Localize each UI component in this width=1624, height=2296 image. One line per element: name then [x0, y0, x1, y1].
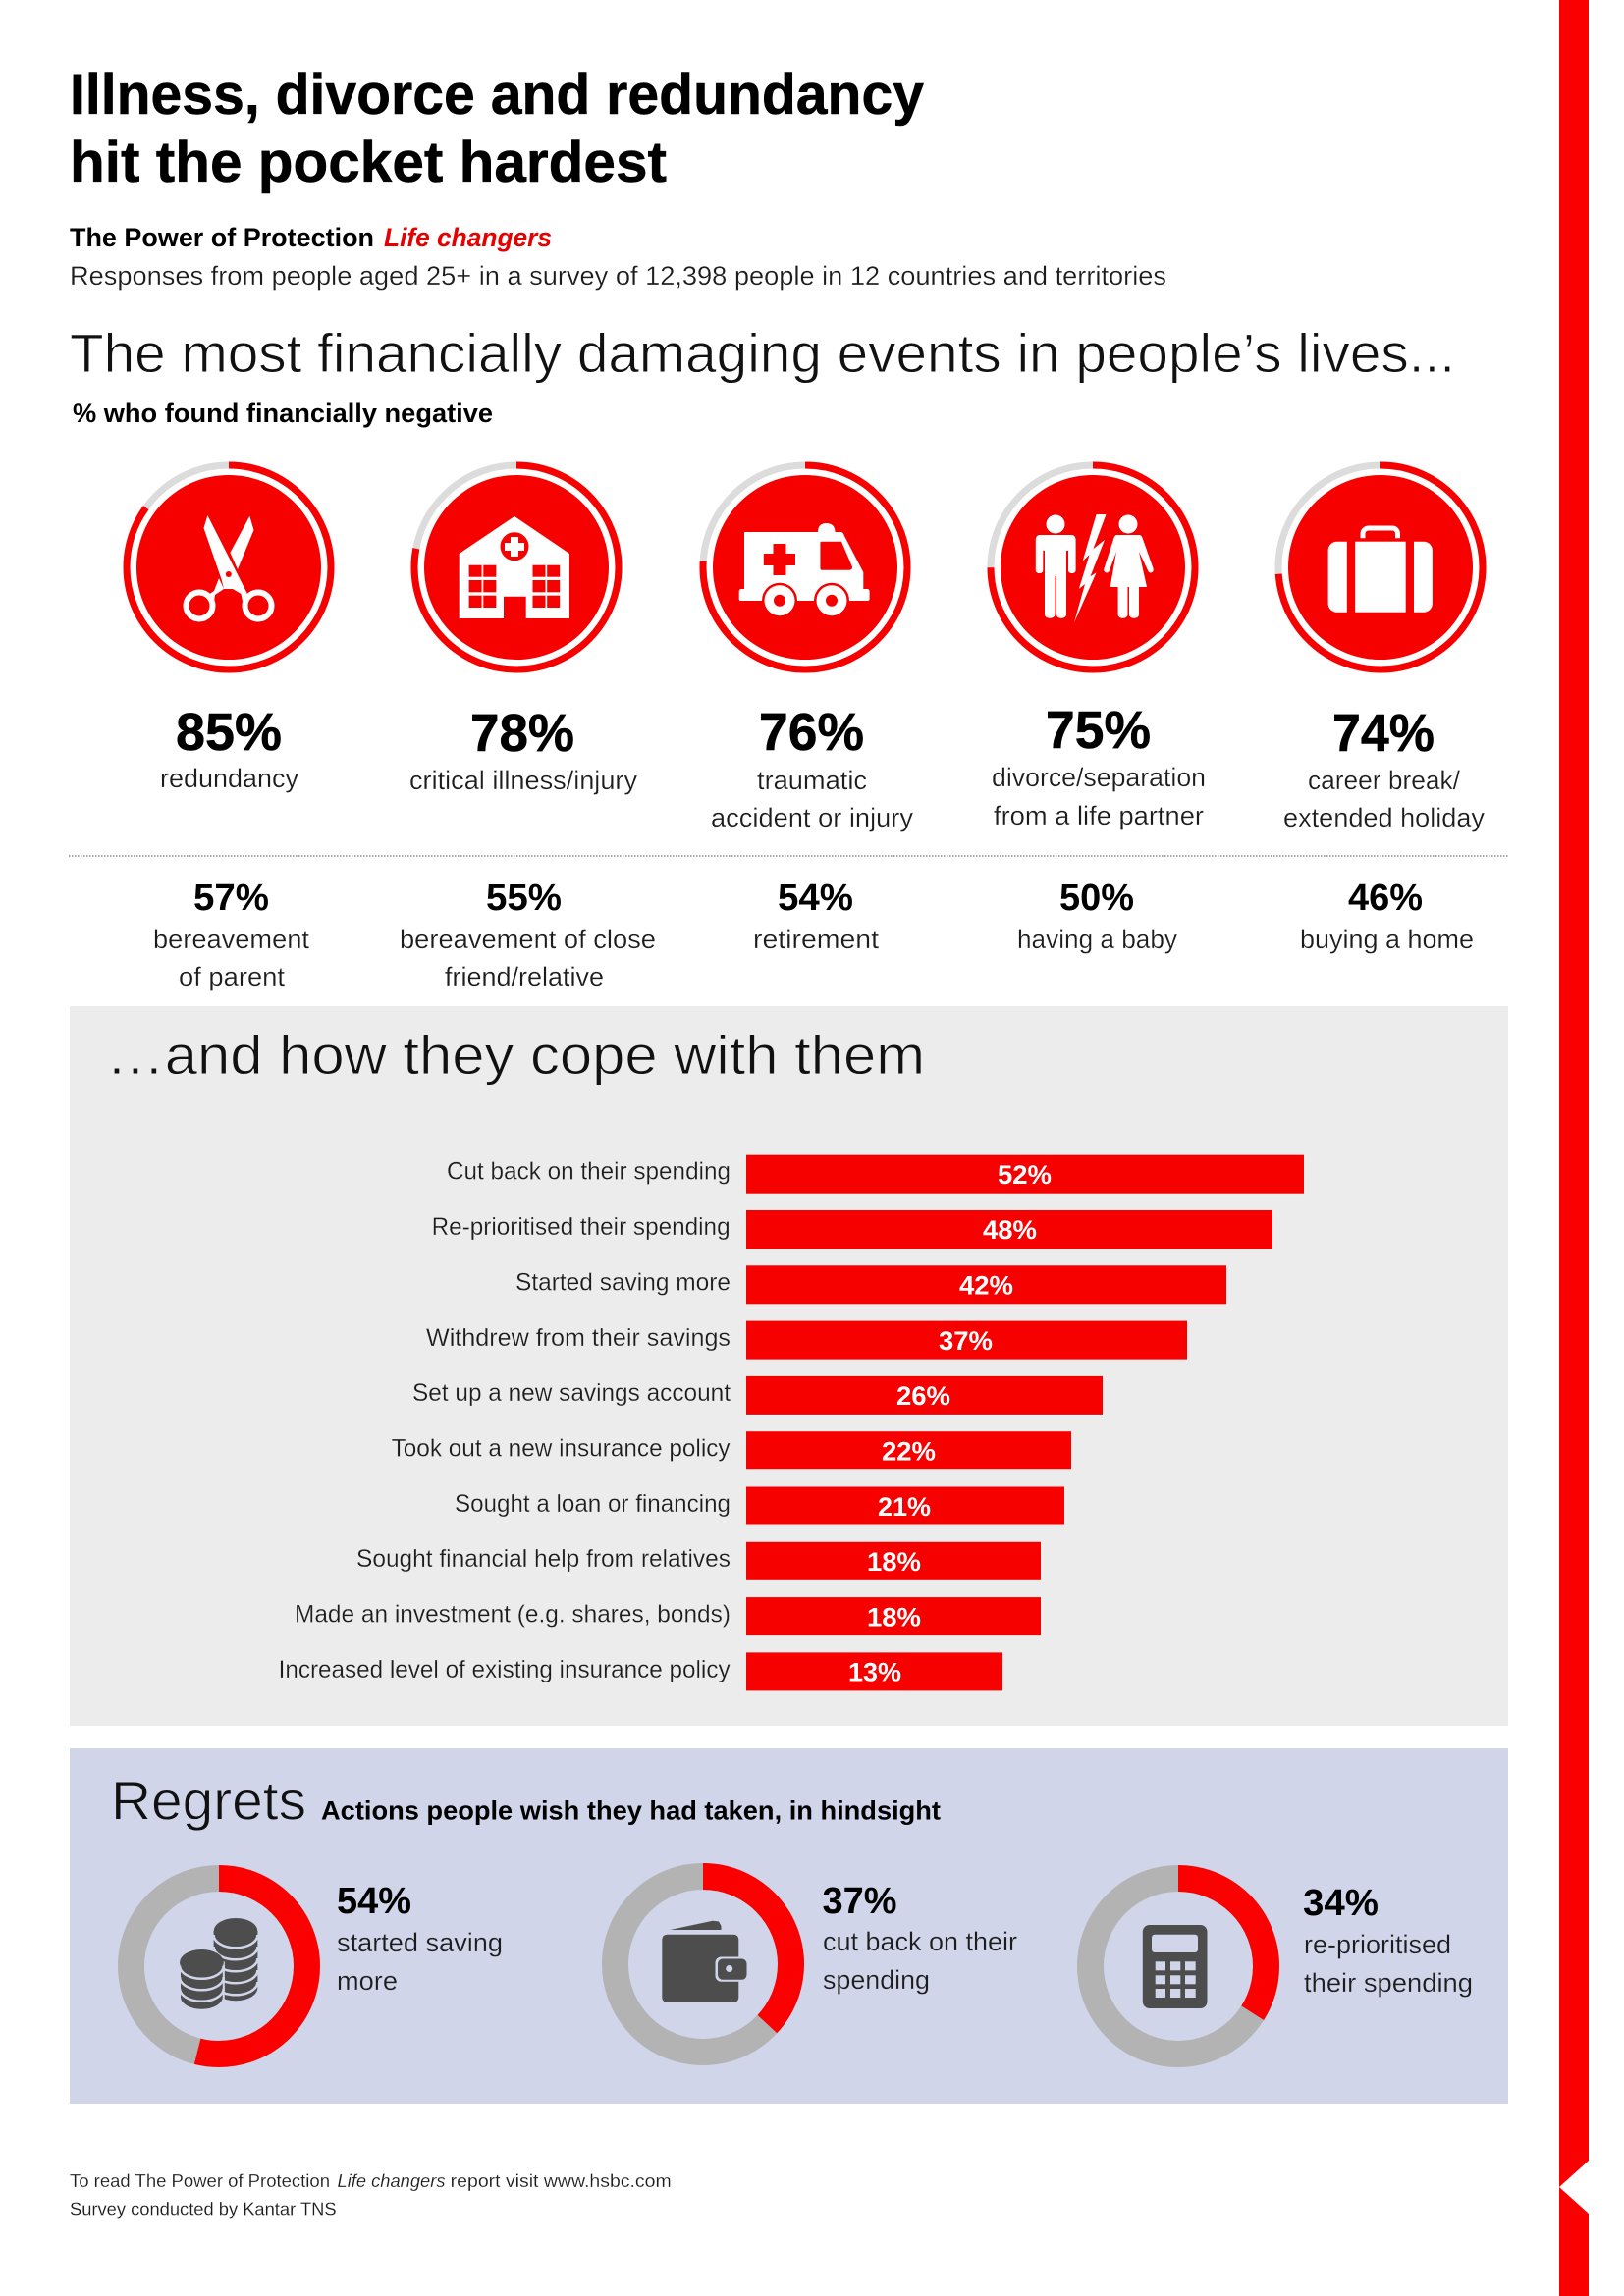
- icon: hospital 78%: [414, 465, 619, 669]
- stat: 46% buying a home: buying a home: [1300, 925, 1474, 954]
- donut: 37% cut back on spending: 37%: [823, 1881, 897, 1922]
- stat: 57% bereavement of parent: 57%: [193, 878, 269, 919]
- donut: 34% re-prioritised spending: 34%: [1303, 1883, 1379, 1924]
- bar chart: coping actions: Made an investment (e.g. shares, bonds): [295, 1600, 731, 1628]
- bar chart: coping actions: Withdrew from their savings: [426, 1324, 731, 1352]
- bar chart: coping actions: 13%: [848, 1657, 901, 1686]
- stat: 74% career break: extended holiday: [1283, 803, 1485, 832]
- red sidebar with chevron notch: [1559, 0, 1589, 2296]
- stat: 46% buying a home: 46%: [1348, 878, 1423, 919]
- title: [70, 63, 924, 194]
- icon: calculator: [1143, 1925, 1208, 2008]
- stat: 55% bereavement of friend: [400, 878, 656, 991]
- bar chart: coping actions: 37%: [939, 1326, 993, 1356]
- bar chart: coping actions: Took out a new insurance policy: [392, 1435, 731, 1463]
- stat: 78% critical illness: [409, 704, 637, 795]
- bar chart: coping actions: 42%: [959, 1270, 1013, 1300]
- footer source note: [70, 2170, 672, 2219]
- title: Illness, divorce and redundancy: [70, 63, 924, 127]
- stat: 50% having a baby: 50%: [1059, 878, 1134, 919]
- donut: 34% re-prioritised spending: re-prioritised: [1304, 1930, 1451, 1959]
- panel: how they cope: [70, 1006, 1508, 1726]
- stat: 75% divorce: from a life partner: [994, 801, 1204, 830]
- section heading: most damaging events: % who found financially negative: [73, 399, 493, 428]
- stat: 57% bereavement of parent: of parent: [179, 962, 286, 991]
- stat: 85% redundancy: redundancy: [160, 764, 298, 793]
- bar chart: coping actions: 48%: [983, 1215, 1037, 1245]
- icon: wallet: [662, 1921, 748, 2002]
- stat: 75% divorce: 75%: [1046, 701, 1151, 760]
- stat: 55% bereavement of friend: 55%: [486, 878, 562, 919]
- heading: how they cope: …and how they cope with them: [106, 1024, 925, 1086]
- donut: 54% started saving more: [132, 1879, 503, 2054]
- subtitle block: The Power of Protection: [70, 223, 374, 252]
- bar chart: coping actions: 26%: [896, 1381, 950, 1411]
- donut: 54% started saving more: started saving: [337, 1928, 503, 1957]
- bar chart: coping actions: Started saving more: [515, 1268, 731, 1296]
- stat: 57% bereavement of parent: [153, 878, 309, 991]
- heading: regrets: Regrets: [111, 1769, 306, 1832]
- icon: scissors 85%: [127, 465, 331, 669]
- stat: 55% bereavement of friend: friend/relative: [445, 962, 604, 991]
- stat: 78% critical illness: critical illness/injury: [409, 766, 637, 795]
- stat: 85% redundancy: 85%: [176, 703, 282, 762]
- stat: 46% buying a home: [1300, 878, 1474, 954]
- bar chart: coping actions: 21%: [878, 1492, 931, 1522]
- stat: 76% traumatic accident: [711, 703, 913, 832]
- stat: 85% redundancy: [160, 703, 298, 793]
- donut: 34% re-prioritised spending: [1090, 1879, 1473, 2054]
- stat: 50% having a baby: having a baby: [1017, 925, 1177, 954]
- subtitle block: [70, 223, 1166, 291]
- bar chart: coping actions: 18%: [867, 1547, 921, 1576]
- stat: 74% career break: 74%: [1332, 704, 1435, 763]
- panel: top five events: [127, 465, 1485, 832]
- icon: separated couple 75%: [991, 465, 1195, 669]
- bar chart: coping actions: Increased level of existing insurance policy: [279, 1656, 731, 1683]
- donut: 37% cut back on spending: cut back on their: [823, 1927, 1017, 1956]
- title: hit the pocket hardest: [70, 131, 667, 194]
- icon: ambulance 76%: [703, 465, 907, 669]
- icon: suitcase 74%: [1278, 465, 1483, 669]
- bar chart: coping actions: Cut back on their spending: [447, 1158, 731, 1186]
- bar chart: coping actions: Re-prioritised their spending: [432, 1213, 731, 1241]
- donut: 54% started saving more: more: [337, 1966, 398, 1996]
- bar chart: coping actions: Sought financial help from relatives: [356, 1545, 731, 1573]
- footer source note: Survey conducted by Kantar TNS: [70, 2199, 337, 2219]
- donut: 54% started saving more: 54%: [337, 1881, 411, 1922]
- heading: regrets: [111, 1769, 941, 1832]
- footer source note: To read The Power of Protection: [70, 2170, 330, 2191]
- bar chart: coping actions: Sought a loan or financing: [455, 1490, 731, 1518]
- stat: 54% retirement: retirement: [753, 925, 880, 954]
- bar chart: coping actions: [279, 1155, 1304, 1690]
- stat: 74% career break: [1283, 704, 1485, 832]
- stat: 76% traumatic accident: 76%: [759, 703, 864, 762]
- stat: 57% bereavement of parent: bereavement: [153, 925, 309, 954]
- bar chart: coping actions: 22%: [882, 1437, 936, 1467]
- donut: 34% re-prioritised spending: their spending: [1304, 1968, 1473, 1998]
- bar chart: coping actions: 18%: [867, 1602, 921, 1631]
- stat: 54% retirement: [753, 878, 880, 954]
- bar chart: coping actions: Set up a new savings account: [412, 1379, 731, 1407]
- panel: secondary events: [153, 878, 1474, 991]
- footer source note: Life changers: [338, 2170, 446, 2191]
- section heading: most damaging events: The most financially damaging events in people’s lives...: [70, 322, 1455, 384]
- panel: regrets: [70, 1748, 1508, 2104]
- stat: 50% having a baby: [1017, 878, 1177, 954]
- stat: 76% traumatic accident: traumatic: [757, 766, 867, 795]
- heading: regrets: Actions people wish they had taken, in hindsight: [321, 1796, 941, 1826]
- stat: 75% divorce: divorce/separation: [992, 763, 1206, 792]
- stat: 75% divorce: [992, 701, 1206, 830]
- donut: 37% cut back on spending: spending: [823, 1965, 930, 1995]
- bar chart: coping actions: 52%: [998, 1160, 1052, 1190]
- subtitle block: Life changers: [384, 223, 552, 252]
- footer source note: report visit www.hsbc.com: [451, 2170, 672, 2191]
- section heading: most damaging events: [70, 322, 1455, 428]
- stat: 78% critical illness: 78%: [470, 704, 574, 763]
- stat: 76% traumatic accident: accident or injury: [711, 803, 913, 832]
- donut: 37% cut back on spending: [615, 1877, 1017, 2052]
- stat: 54% retirement: 54%: [778, 878, 853, 919]
- stat: 74% career break: career break/: [1308, 766, 1460, 795]
- icon: coins: [180, 1918, 257, 2010]
- subtitle block: Responses from people aged 25+ in a survey of 12,398 people in 12 countries and territories: [70, 261, 1166, 291]
- stat: 55% bereavement of friend: bereavement of close: [400, 925, 656, 954]
